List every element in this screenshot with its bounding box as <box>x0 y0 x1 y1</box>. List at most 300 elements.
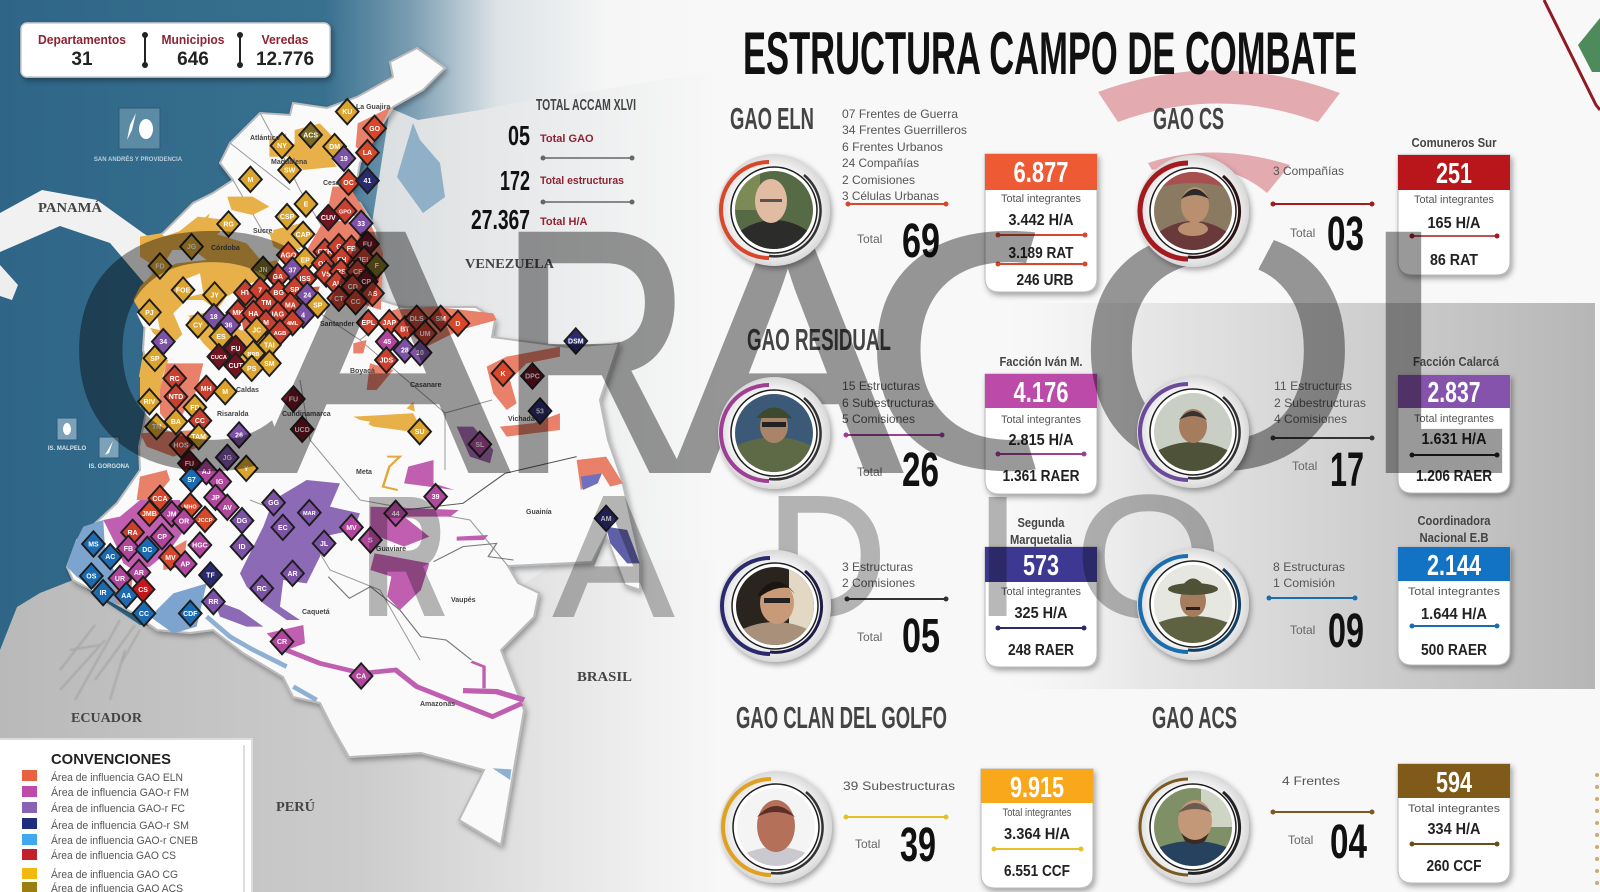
map markers north: DPC <box>525 373 540 380</box>
map markers north: GO <box>369 126 381 133</box>
map markers north: AL <box>332 281 342 288</box>
map markers north: AGB <box>274 331 286 337</box>
map markers north: NTD <box>169 394 183 401</box>
panel: Faccion Calarca: 4 Comisiones <box>1274 412 1347 426</box>
card: Ivan M.: Total integrantes <box>1001 414 1081 426</box>
map markers south: GG <box>268 500 279 507</box>
country labels <box>38 199 632 815</box>
map department labels: Santander <box>320 321 355 328</box>
map markers south: DG <box>237 518 247 525</box>
map markers north: SL <box>475 442 485 449</box>
map markers south: CDF <box>183 611 198 618</box>
panel: GAO CS: Comuneros Sur <box>1412 135 1496 150</box>
watermark: RADIO: O <box>1076 462 1221 652</box>
panel: Segunda Marquetalia: 3 Estructuras <box>842 560 913 574</box>
map markers north: HOS <box>173 442 189 449</box>
total ACCAM summary: Total GAO <box>540 133 594 145</box>
summary box <box>21 23 330 77</box>
panel: Faccion Calarca: 17 <box>1330 444 1364 497</box>
panel: Faccion Calarca: 2 Subestructuras <box>1274 396 1366 410</box>
panel: Segunda Marquetalia: 2 Comisiones <box>842 576 915 590</box>
map markers south: JM <box>167 511 177 518</box>
watermark: CARACOL: A <box>258 161 509 543</box>
panel: Coordinadora Nacional E.B: Total <box>1290 623 1315 637</box>
card: Segunda Marquetalia <box>985 547 1097 667</box>
map department labels: Sucre <box>253 228 273 235</box>
map markers north: CAP <box>296 232 311 239</box>
panel: GAO ELN: 6 Frentes Urbanos <box>842 140 943 154</box>
panel: Faccion Calarca: Total <box>1292 459 1317 473</box>
land: Venezuela and Brazil <box>360 70 720 600</box>
country labels: VENEZUELA <box>465 257 555 272</box>
card: Segunda Marquetalia: 573 <box>1023 550 1059 582</box>
legend: Área de influencia GAO-r SM <box>51 819 189 832</box>
map markers north: CD <box>348 284 358 291</box>
legend: Área de influencia GAO-r FC <box>51 802 185 815</box>
map influence areas south <box>67 470 360 700</box>
legend: Área de influencia GAO ELN <box>51 771 183 784</box>
panel: Faccion Ivan M. <box>842 354 1097 497</box>
map markers south: RR <box>208 599 218 606</box>
map markers north: AS <box>368 291 378 298</box>
map markers south: AR <box>134 570 144 577</box>
watermark: RADIO: A <box>555 462 673 652</box>
map markers north: FU <box>231 346 240 353</box>
map markers north: 41 <box>364 178 371 185</box>
map markers north: MA <box>285 302 296 309</box>
map markers north: BT <box>400 326 410 333</box>
panel: Segunda Marquetalia: Marquetalia <box>1010 532 1073 547</box>
panel: GAO ELN: 24 Compañías <box>842 156 919 170</box>
map markers north: FU <box>363 241 372 248</box>
photo: ELN leader <box>718 154 830 266</box>
map department labels: Vichada <box>508 416 535 423</box>
map markers south: CA <box>356 673 366 680</box>
map markers south: JP <box>211 495 220 502</box>
map markers north: CC <box>195 418 205 425</box>
panel: Faccion Ivan M.: Facción Iván M. <box>1000 354 1082 369</box>
icon: Gorgona inset <box>89 437 130 470</box>
map markers north: BRB <box>247 352 259 358</box>
map markers north: JY <box>210 292 219 299</box>
card: CS: 165 H/A <box>1428 215 1481 232</box>
card: ELN: 3.189 RAT <box>1008 245 1074 262</box>
panel: Coordinadora Nacional E.B: 1 Comisión <box>1273 576 1335 590</box>
map markers north: SM <box>264 361 275 368</box>
map markers north: MH <box>201 386 212 393</box>
watermark: RADIO: I <box>974 462 1021 652</box>
card: CS: 86 RAT <box>1430 252 1478 269</box>
map markers north: CUT <box>229 363 244 370</box>
map markers north: EP <box>300 257 310 264</box>
map markers north: UM <box>420 331 431 338</box>
map markers north: TM <box>261 300 272 307</box>
panel: GAO Clan del Golfo: 39 Subestructuras <box>843 779 955 793</box>
map markers north: BG <box>273 290 284 297</box>
map markers north: ES <box>216 334 226 341</box>
map department labels: Boyacá <box>350 368 375 375</box>
map markers south: IR <box>100 590 107 597</box>
map department labels: Caquetá <box>302 609 330 616</box>
icon: Malpelo inset: IS. MALPELO <box>48 446 86 452</box>
map markers north: 45 <box>383 339 391 346</box>
panel: GAO Clan del Golfo: 39 <box>900 819 936 872</box>
map markers south: MAR <box>303 511 316 517</box>
map markers north: OC <box>343 180 354 187</box>
map markers south: CC <box>139 611 149 618</box>
card: CS <box>1398 155 1510 275</box>
watermark: CARACOL <box>79 230 1502 473</box>
map markers north: FH <box>337 257 346 264</box>
panel: GAO ACS: 4 Frentes <box>1282 774 1340 788</box>
map department labels: Meta <box>356 469 372 476</box>
map markers north: ACS <box>303 132 318 139</box>
map markers north: IAG <box>272 311 284 318</box>
map markers north: JAP <box>383 320 396 327</box>
map markers south: OS <box>86 573 97 580</box>
map markers north: 34 <box>159 339 167 346</box>
map markers north: CT <box>334 296 344 303</box>
edge dots <box>1595 773 1599 885</box>
summary box: 12.776 <box>256 49 314 70</box>
card: ACS: 594 <box>1436 767 1472 799</box>
panel: Coordinadora Nacional E.B <box>1266 513 1510 665</box>
panel: GAO CS: Total <box>1290 226 1315 240</box>
country labels: PANAMÁ <box>38 199 103 216</box>
heading: GAO ELN: GAO ELN <box>730 101 814 136</box>
card: ELN: 3.442 H/A <box>1008 212 1074 229</box>
card: Calarca <box>1398 375 1510 493</box>
map markers south: CCA <box>152 496 168 503</box>
map markers south: FB <box>124 546 133 553</box>
map markers south: FU <box>185 461 194 468</box>
map markers north: LA <box>363 150 372 157</box>
photo: Ivan M. leader <box>718 377 830 489</box>
country labels: PERÚ <box>276 798 315 815</box>
map markers north: DM <box>329 144 340 151</box>
map markers north: CTR <box>318 249 332 256</box>
land: Ecuador and Peru <box>0 560 720 892</box>
map department labels: Córdoba <box>211 245 240 252</box>
panel: GAO ELN: 2 Comisiones <box>842 173 915 187</box>
map markers north: CUV <box>321 215 336 222</box>
panel: Faccion Ivan M.: 5 Comisiones <box>842 412 915 426</box>
panel: GAO ELN: 34 Frentes Guerrilleros <box>842 123 967 137</box>
panel: Faccion Ivan M.: 26 <box>902 444 939 497</box>
map markers south: EC <box>278 525 288 532</box>
map markers south: AC <box>105 554 115 561</box>
map markers south: OR <box>179 518 189 525</box>
map markers south: MS <box>88 541 99 548</box>
card: ACS: 260 CCF <box>1426 858 1482 875</box>
map department labels: Guaviare <box>376 546 406 553</box>
card: CS: 251 <box>1436 158 1472 190</box>
map markers south: S <box>368 537 373 544</box>
icon: San Andres inset <box>94 108 183 163</box>
map markers north: UCD <box>295 427 310 434</box>
map markers north: DLS <box>410 316 424 323</box>
photo: Clan del Golfo leader <box>720 771 832 883</box>
map markers north: FU <box>289 396 298 403</box>
map markers north: CSP <box>280 214 295 221</box>
map markers north: KU <box>342 109 352 116</box>
map markers north: SW <box>284 167 296 174</box>
map department labels: Caldas <box>236 387 259 394</box>
card: ELN: 246 URB <box>1016 272 1074 289</box>
card: ELN <box>985 154 1097 292</box>
panel: GAO ACS: Total <box>1288 833 1313 847</box>
card: Ivan M.: 2.815 H/A <box>1008 432 1074 449</box>
lake Maracaibo <box>397 123 445 213</box>
photo: ACS leader <box>1137 771 1249 883</box>
map markers north: DSM <box>568 338 584 345</box>
map department labels: Guainía <box>526 509 552 516</box>
panel: GAO Clan del Golfo: Total <box>855 837 880 851</box>
map markers north: AGO <box>280 252 297 259</box>
card: Clan del Golfo: 6.551 CCF <box>1004 863 1070 880</box>
panel: GAO CS: 3 Compañías <box>1273 164 1344 178</box>
map department labels: Amazonas <box>420 701 455 708</box>
card: Coordinadora Nacional: 1.644 H/A <box>1421 606 1487 623</box>
panel: Faccion Ivan M.: 6 Subestructuras <box>842 396 934 410</box>
card: ELN: Total integrantes <box>1001 193 1081 205</box>
decorative logo arcs: pink <box>1098 70 1340 193</box>
country labels: ECUADOR <box>71 711 143 726</box>
map department labels: Vaupés <box>451 597 476 604</box>
map markers south: RA <box>128 530 138 537</box>
watermark: CARACOL: L <box>1373 161 1507 543</box>
map markers north: 18 <box>210 314 218 321</box>
card: CS: Total integrantes <box>1414 194 1494 206</box>
watermark: RADIO <box>362 462 1221 652</box>
map markers north: M <box>222 389 228 396</box>
map department labels: Cesar <box>323 180 343 187</box>
map markers north: EPL <box>361 320 376 327</box>
Ecuador terrain hatching <box>60 620 140 700</box>
map markers north: HA <box>248 311 258 318</box>
map markers north: JEL <box>358 257 371 264</box>
total ACCAM summary: TOTAL ACCAM XLVI <box>536 97 636 114</box>
card: Clan del Golfo <box>981 769 1093 888</box>
map markers north: F <box>375 263 380 270</box>
card: Segunda Marquetalia: 248 RAER <box>1008 642 1074 659</box>
map department labels <box>211 104 552 708</box>
watermark: RADIO: D <box>767 462 886 652</box>
map markers south: S7 <box>187 477 196 484</box>
total ACCAM summary: 172 <box>500 165 530 196</box>
map markers north: BA <box>171 419 181 426</box>
card: ACS <box>1398 764 1510 883</box>
total ACCAM summary: Total H/A <box>540 216 588 228</box>
map markers north: K <box>500 371 505 378</box>
map markers north: D <box>455 321 460 328</box>
card: ACS: Total integrantes <box>1408 803 1501 815</box>
watermark: CARACOL: O <box>1077 166 1359 536</box>
map markers south: AJ <box>202 469 211 476</box>
panel: Coordinadora Nacional E.B: 09 <box>1328 605 1364 658</box>
map markers south: 44 <box>392 511 400 518</box>
map markers north: CF <box>353 269 363 276</box>
map markers south: MV <box>165 555 176 562</box>
map influence areas north <box>139 107 391 383</box>
map markers north: M <box>248 177 254 184</box>
summary box: Veredas <box>262 33 309 47</box>
legend <box>0 739 252 892</box>
right band <box>1000 303 1595 689</box>
panel: GAO Clan del Golfo <box>843 769 1093 888</box>
panel: Faccion Ivan M.: Total <box>857 465 882 479</box>
map markers south: 39 <box>432 494 440 501</box>
map markers north: 36 <box>225 322 233 329</box>
map markers north: JDS <box>380 357 394 364</box>
map markers south: AV <box>223 505 232 512</box>
card: ACS: 334 H/A <box>1428 821 1481 838</box>
card: Clan del Golfo: Total integrantes <box>1002 807 1072 819</box>
watermark: CARACOL: A <box>675 161 902 543</box>
map markers north: M <box>263 320 269 327</box>
map markers north: 33 <box>357 221 365 228</box>
card: Ivan M.: 4.176 <box>1014 377 1068 409</box>
map markers north: JC <box>252 327 261 334</box>
card: Coordinadora Nacional: 500 RAER <box>1421 642 1487 659</box>
map markers south: AP <box>180 561 190 568</box>
map markers north: RG <box>223 221 234 228</box>
card: Ivan M. <box>985 374 1097 494</box>
summary box: 646 <box>177 49 209 70</box>
corner logo <box>1544 0 1600 110</box>
card: ELN: 6.877 <box>1014 157 1068 189</box>
map markers north: ON <box>318 261 328 268</box>
card: Coordinadora Nacional <box>1398 547 1510 665</box>
map markers north: FB <box>347 246 356 253</box>
map markers north: CY <box>193 322 203 329</box>
map markers north: 37 <box>289 267 297 274</box>
map markers south: CR <box>277 639 287 646</box>
summary box: Municipios <box>162 33 225 47</box>
photo: Coordinadora Nacional leader <box>1137 548 1249 660</box>
panel: Faccion Calarca: Facción Calarcá <box>1413 354 1500 369</box>
map markers north: 53 <box>536 408 544 415</box>
photo: Segunda Marquetalia leader <box>719 550 831 662</box>
map markers south <box>80 445 617 689</box>
panel: Segunda Marquetalia: 05 <box>902 610 940 663</box>
legend: Área de influencia GAO CG <box>51 868 178 881</box>
map markers south: MV <box>346 525 357 532</box>
map markers south: JG <box>223 455 232 462</box>
total ACCAM summary <box>471 97 636 235</box>
map markers north: SP <box>290 287 300 294</box>
map markers south: TF <box>206 572 215 579</box>
watermark: CARACOL: C <box>63 166 341 536</box>
panel: GAO ELN: 3 Células Urbanas <box>842 189 939 203</box>
land: Panama west <box>0 265 18 300</box>
land: Panama <box>0 190 170 290</box>
ocean <box>0 0 720 700</box>
map markers north: CP <box>361 279 371 286</box>
panel: Faccion Calarca: 11 Estructuras <box>1274 379 1352 393</box>
map markers north: TAM <box>191 434 206 441</box>
map markers north: 28 <box>401 347 409 354</box>
watermark: CARACOL: R <box>499 161 692 543</box>
total ACCAM summary: 27.367 <box>471 204 530 235</box>
panel: Coordinadora Nacional E.B: Coordinadora <box>1418 513 1491 528</box>
map markers south: HGC <box>192 542 208 549</box>
panel: Coordinadora Nacional E.B: 8 Estructuras <box>1273 560 1345 574</box>
watermark: RADIO: R <box>362 462 446 652</box>
map markers north: RIV <box>144 399 156 406</box>
map markers north: PS <box>247 366 257 373</box>
heading: GAO RESIDUAL: GAO RESIDUAL <box>747 322 891 357</box>
legend: Área de influencia GAO-r CNEB <box>51 834 198 847</box>
map markers north: 4ML <box>287 321 299 327</box>
panel: GAO CS <box>1270 135 1510 275</box>
summary box: 31 <box>71 49 93 70</box>
panel: GAO ELN: 69 <box>902 215 940 268</box>
panel: Segunda Marquetalia: Segunda <box>1018 515 1065 530</box>
map markers north: SP <box>150 356 160 363</box>
map markers south: JCCP <box>198 518 213 524</box>
map markers south: MHO <box>184 504 197 510</box>
map markers south: CP <box>157 534 167 541</box>
map markers south: ID <box>239 544 246 551</box>
map markers north: 10 <box>416 350 424 357</box>
map markers north: E <box>304 201 309 208</box>
map markers north: CUCA <box>211 355 227 361</box>
map markers south: Y <box>244 466 249 473</box>
total ACCAM summary: Total estructuras <box>540 175 624 187</box>
map department labels: Risaralda <box>217 411 249 418</box>
heading: GAO CS: GAO CS <box>1153 101 1224 136</box>
panel: GAO CS: 03 <box>1327 208 1364 261</box>
card: Clan del Golfo: 3.364 H/A <box>1004 826 1070 843</box>
heading: GAO CLAN DEL GOLFO: GAO CLAN DEL GOLFO <box>736 700 947 735</box>
map markers north: PJ <box>145 310 154 317</box>
summary box: Departamentos <box>38 33 126 47</box>
panel: Segunda Marquetalia <box>842 515 1097 667</box>
photo: CS leader <box>1137 155 1249 267</box>
map markers north: GPO <box>339 209 352 215</box>
map markers north: JG <box>187 244 196 251</box>
watermark: CARACOL: C <box>861 166 1139 536</box>
map markers north: SU <box>415 429 424 436</box>
map influence areas centre <box>133 213 560 463</box>
heading: GAO ACS: GAO ACS <box>1152 700 1237 735</box>
map markers north: VS <box>322 271 331 278</box>
card: Ivan M.: 1.361 RAER <box>1002 468 1080 485</box>
card: Segunda Marquetalia: Total integrantes <box>1001 586 1081 598</box>
map markers south: DC <box>142 547 152 554</box>
map markers north: C <box>336 244 341 251</box>
panel: Coordinadora Nacional E.B: Nacional E.B <box>1420 530 1488 545</box>
map department labels: Magdalena <box>271 159 307 166</box>
card: Calarca: 1.631 H/A <box>1422 431 1487 448</box>
map markers north: GA <box>273 274 283 281</box>
panel: Faccion Calarca <box>1270 354 1510 497</box>
card: Calarca: Total integrantes <box>1414 413 1494 425</box>
map markers south: AR <box>287 571 298 578</box>
map markers north: 19 <box>340 156 348 163</box>
map markers north: RS <box>336 269 346 276</box>
map markers south: IG <box>216 479 223 486</box>
map markers south: AM <box>601 516 612 523</box>
map markers north: FD <box>155 263 165 270</box>
map department labels: Atlántico <box>250 135 280 142</box>
map markers north: CC <box>351 299 361 306</box>
map markers south: CS <box>138 587 148 594</box>
map markers north: 24 <box>303 292 311 299</box>
map markers north <box>138 99 587 458</box>
panel: GAO ELN: 07 Frentes de Guerra <box>842 107 958 121</box>
